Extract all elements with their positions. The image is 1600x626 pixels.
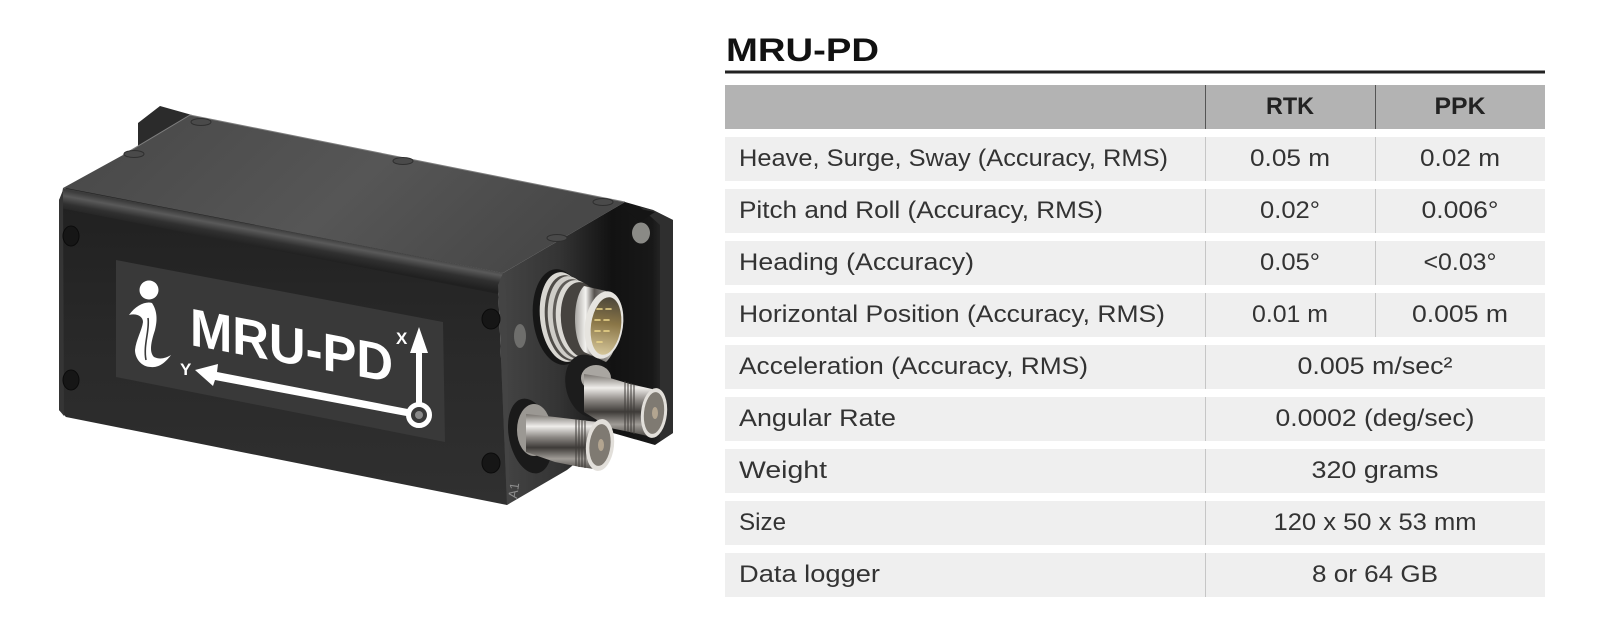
end face with flange <box>498 202 673 505</box>
table header: PPK <box>1434 93 1486 120</box>
row: heading <box>725 241 1545 285</box>
row: heave surge sway: Heave, Surge, Sway (Accuracy, RMS) <box>739 145 1168 172</box>
row: weight: Weight <box>739 457 827 484</box>
row: heave surge sway: 0.02 m <box>1420 145 1500 172</box>
A1 marking: A1 <box>505 482 522 499</box>
row: heading: 0.05° <box>1260 249 1320 276</box>
title: MRU-PD <box>726 32 879 68</box>
screws <box>63 118 613 473</box>
row: weight: 320 grams <box>1312 457 1438 484</box>
row: heave surge sway <box>725 137 1545 181</box>
row: acceleration: Acceleration (Accuracy, RMS) <box>739 353 1088 380</box>
label plate <box>116 260 445 442</box>
circular multi-pin connector <box>528 266 628 368</box>
row: horizontal position <box>725 293 1545 337</box>
coaxial connector front <box>502 394 617 478</box>
table header: RTK <box>1266 93 1315 120</box>
row: size <box>725 501 1545 545</box>
row: size: Size <box>739 509 786 536</box>
row: angular rate: Angular Rate <box>739 405 896 432</box>
row: horizontal position: Horizontal Position (Accuracy, RMS) <box>739 301 1165 328</box>
axis arrows: Y <box>180 360 192 379</box>
axis arrows <box>180 327 430 426</box>
row: data logger: 8 or 64 GB <box>1312 561 1438 588</box>
right front edge <box>498 273 510 505</box>
left front edge <box>59 190 64 416</box>
row: size: 120 x 50 x 53 mm <box>1274 509 1476 536</box>
flange hole and pin <box>514 222 650 348</box>
row: angular rate <box>725 397 1545 441</box>
row: angular rate: 0.0002 (deg/sec) <box>1276 405 1474 432</box>
rounded top edge highlight <box>60 188 503 294</box>
row: data logger: Data logger <box>739 561 880 588</box>
coaxial connector rear <box>558 349 670 439</box>
row: heading: Heading (Accuracy) <box>739 249 974 276</box>
row: data logger <box>725 553 1545 597</box>
row: acceleration <box>725 345 1545 389</box>
row: pitch and roll: Pitch and Roll (Accuracy, RMS) <box>739 197 1103 224</box>
illustration: MRU-PD device <box>59 106 673 505</box>
logo: stylised i <box>129 280 171 367</box>
row: heave surge sway: 0.05 m <box>1250 145 1330 172</box>
row: heading: <0.03° <box>1424 249 1496 276</box>
row: weight <box>725 449 1545 493</box>
product name on plate: MRU-PD <box>190 298 393 394</box>
row: pitch and roll: 0.006° <box>1422 197 1498 224</box>
row: horizontal position: 0.005 m <box>1412 301 1508 328</box>
mounting ear at rear <box>138 106 192 148</box>
row: pitch and roll: 0.02° <box>1260 197 1320 224</box>
table header <box>725 85 1545 129</box>
front face <box>59 188 507 505</box>
axis arrows: X <box>396 329 408 348</box>
row: pitch and roll <box>725 189 1545 233</box>
top face <box>63 115 625 273</box>
title underline <box>725 70 1545 74</box>
row: horizontal position: 0.01 m <box>1252 301 1328 328</box>
specification table <box>725 85 1545 597</box>
row: acceleration: 0.005 m/sec² <box>1298 353 1452 380</box>
